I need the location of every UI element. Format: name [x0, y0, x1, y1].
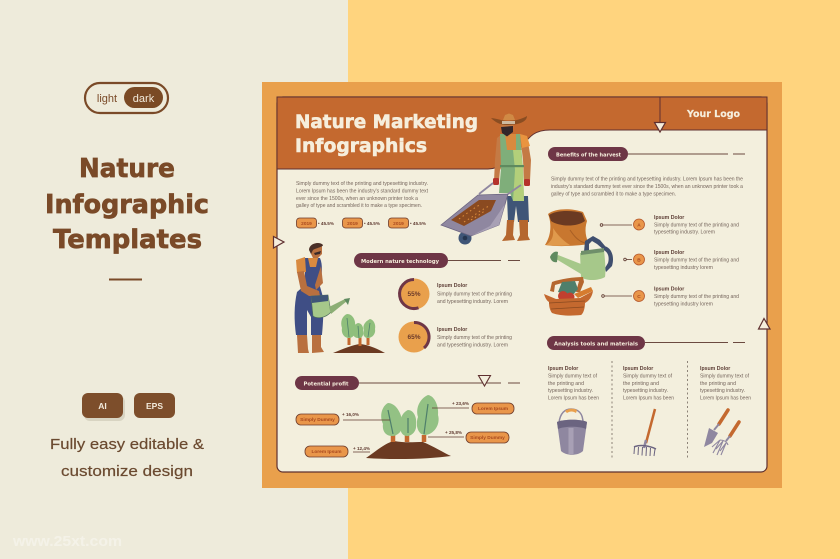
donut chart: 55%: 55%	[407, 291, 421, 298]
intro text: Lorem Ipsum has been the industry's standard dummy text	[296, 188, 428, 194]
icon: vegetable basket	[544, 277, 593, 316]
connector: C	[602, 290, 644, 302]
connector: B	[624, 254, 644, 265]
section pill: Modern nature technology	[354, 253, 520, 268]
text: benefit C	[654, 286, 739, 308]
connector: A	[600, 219, 644, 230]
text: tools column 1: Ipsum Dolor	[548, 366, 578, 372]
arrow: header marker	[654, 97, 666, 132]
watermark: www.25xt.com	[12, 533, 122, 550]
text: donut 55%: Ipsum Dolor	[437, 283, 467, 289]
callouts: profit labels: + 12,4%	[353, 446, 370, 451]
intro text	[296, 181, 428, 209]
year stats: 2019	[393, 221, 404, 227]
text: tools column 1	[548, 366, 599, 402]
title: Infographics	[295, 135, 427, 157]
section pill: Analysis tools and materials	[547, 336, 745, 350]
title	[295, 111, 478, 157]
text: tools column 3	[700, 366, 751, 402]
illustration: profit plant chart	[366, 395, 451, 459]
illustration: farmer with wheelbarrow	[441, 114, 531, 244]
text: donut 55%: and typesetting industry. Lorem	[437, 299, 508, 305]
tagline	[50, 436, 204, 480]
text: tools column 3: Simply dummy text of	[700, 374, 749, 380]
year stats	[296, 218, 426, 228]
section pill: Benefits of the harvest	[548, 147, 745, 161]
text: benefit A: typesetting industry. Lorem	[654, 230, 715, 236]
text: donut 65%: and typesetting industry. Lorem	[437, 342, 508, 348]
tagline: customize design	[61, 463, 193, 480]
year stats: • 45.5%	[364, 221, 380, 226]
year stats: • 45.5%	[410, 221, 426, 226]
section pill: Modern nature technology: Modern nature technology	[361, 259, 439, 265]
text: benefit B	[654, 250, 739, 271]
year stats: 2019	[301, 221, 312, 227]
section pill: Potential profit: Potential profit	[304, 382, 349, 388]
text: tools column 3: typesetting industry.	[700, 388, 745, 394]
title: Nature Marketing	[295, 111, 478, 133]
heading: Nature Infographic Templates: Nature	[79, 154, 175, 184]
intro text: galley of type and scrambled it to make a type specimen.	[296, 203, 422, 209]
text: donut 65%	[437, 327, 512, 348]
toggle: light / dark: dark	[133, 93, 155, 105]
callouts: profit labels: + 23,6%	[452, 401, 469, 406]
text: benefit C: Simply dummy text of the printing and	[654, 294, 739, 300]
format badges: AI and EPS: AI	[98, 401, 107, 411]
text: benefit B: typesetting industry lorem	[654, 265, 713, 271]
format badges: AI and EPS	[82, 393, 175, 421]
text: benefit B: Ipsum Dolor	[654, 250, 684, 256]
intro text: Simply dummy text of the printing and typesetting industry.	[296, 181, 428, 187]
column dividers	[612, 361, 688, 460]
callouts: profit labels: Simply Dummy	[470, 435, 505, 441]
callouts: profit labels: Simply Dummy	[300, 417, 335, 423]
illustration: seedlings in mound	[333, 314, 385, 353]
text: tools column 2	[623, 366, 674, 402]
text: donut 55%: Simply dummy text of the printing	[437, 292, 512, 298]
connector: C: C	[637, 294, 641, 300]
icon: bucket	[557, 409, 587, 455]
text: donut 65%: Simply dummy text of the printing	[437, 335, 512, 341]
icon: grain sack	[545, 209, 589, 246]
text: harvest intro: industry's standard dummy text ever since the 1500s, when an unknown printer took a	[551, 184, 743, 190]
text: tools column 2: typesetting industry.	[623, 388, 668, 394]
text: benefit A: Simply dummy text of the printing and	[654, 222, 739, 228]
text: tools column 2: Lorem Ipsum has been	[623, 396, 674, 402]
illustration: gardener with watering can	[295, 243, 350, 353]
logo: Your Logo	[686, 109, 740, 120]
text: benefit A	[654, 215, 739, 236]
text: harvest intro: galley of type and scrambled it to make a type specimen.	[551, 192, 676, 198]
section pill: Analysis tools and materials: Analysis tools and materials	[554, 342, 638, 348]
text: tools column 1: Simply dummy text of	[548, 374, 597, 380]
callouts: profit labels: Lorem Ipsum	[478, 406, 508, 412]
text: benefit C: Ipsum Dolor	[654, 286, 684, 292]
text: donut 55%	[437, 283, 512, 305]
callouts: profit labels: Lorem Ipsum	[311, 449, 342, 455]
text: tools column 2: Ipsum Dolor	[623, 366, 653, 372]
panel: infographic board	[262, 82, 782, 488]
connector: A: A	[637, 222, 641, 228]
callouts: profit labels: + 16,0%	[342, 412, 359, 417]
year stats: 2019	[347, 221, 358, 227]
arrow: profit marker	[478, 376, 490, 386]
text: tools column 3: Lorem Ipsum has been	[700, 396, 751, 402]
text: tools column 2: Simply dummy text of	[623, 374, 672, 380]
connector: B: B	[637, 258, 641, 264]
toggle: light / dark: light	[97, 93, 117, 105]
icon: rake	[634, 409, 656, 456]
text: tools column 1: typesetting industry.	[548, 388, 593, 394]
icon: trowel and fork	[704, 410, 739, 455]
section pill: Benefits of the harvest: Benefits of the harvest	[556, 152, 621, 158]
donut chart: 65%	[398, 322, 430, 352]
callouts: profit labels	[296, 401, 514, 457]
format badges: AI and EPS: EPS	[146, 401, 163, 411]
icon: watering can	[550, 236, 613, 280]
heading: Nature Infographic Templates	[45, 154, 209, 255]
header band	[277, 97, 767, 169]
arrow: right marker	[758, 318, 770, 329]
text: tools column 1: the printing and	[548, 381, 584, 387]
donut chart: 65%: 65%	[407, 334, 421, 341]
text: benefit B: Simply dummy text of the printing and	[654, 258, 739, 264]
text: tools column 3: the printing and	[700, 381, 736, 387]
text: harvest intro	[551, 176, 743, 198]
heading: Nature Infographic Templates: Infographic	[45, 190, 209, 220]
intro text: ever since the 1500s, when an unknown printer took a	[296, 196, 418, 202]
text: tools column 2: the printing and	[623, 381, 659, 387]
text: tools column 3: Ipsum Dolor	[700, 366, 730, 372]
heading: Nature Infographic Templates: Templates	[53, 225, 202, 255]
year stats: • 45.5%	[318, 221, 334, 226]
donut chart: 55%	[398, 278, 430, 310]
tagline: Fully easy editable &	[50, 436, 204, 453]
text: donut 65%: Ipsum Dolor	[437, 327, 467, 333]
text: harvest intro: Simply dummy text of the printing and typesetting industry. Lorem Ipsum has been the	[551, 176, 743, 182]
text: benefit A: Ipsum Dolor	[654, 215, 684, 221]
text: tools column 1: Lorem Ipsum has been	[548, 396, 599, 402]
arrow: left marker	[274, 236, 284, 248]
section pill: Potential profit	[295, 376, 520, 390]
callouts: profit labels: + 25,8%	[445, 430, 462, 435]
toggle: light / dark	[85, 83, 168, 113]
text: benefit C: typesetting industry lorem	[654, 302, 713, 308]
